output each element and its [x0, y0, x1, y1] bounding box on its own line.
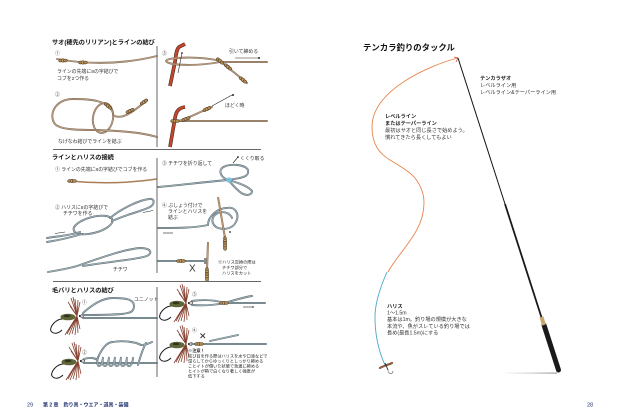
step 2 figure — [52, 341, 157, 380]
step 3 figure: 引いて締める — [229, 48, 258, 55]
label: level line: レベルライン — [385, 113, 416, 120]
heading: line and tippet: ラインとハリスの接続 — [52, 154, 115, 162]
label: tippet: 長め(最長1.5m)にする — [387, 330, 438, 336]
label: level line: またはテーパーライン — [385, 119, 437, 127]
footer left page number: 29 — [27, 402, 33, 408]
bad example figure: ※ハリス交換の際は — [218, 258, 256, 266]
step 3 figure: ③ チチワを折り返して — [162, 160, 212, 167]
arrow tip at rod end — [454, 57, 458, 62]
step 1 figure: ① ラインの先端に8の字結びでコブを作る — [55, 166, 147, 173]
label: tippet: ハリス — [387, 303, 403, 310]
note text: 湿らしてからゆっくりとしっかり締める — [188, 358, 263, 364]
note text — [188, 347, 267, 380]
step 1 figure: ① — [82, 299, 87, 306]
step 4 figure — [158, 197, 237, 250]
rod shadow — [500, 372, 557, 374]
tippet blue line — [375, 272, 387, 365]
label: level line: 慣れてきたら長くしてもよい — [385, 133, 452, 141]
tenkara rod — [458, 58, 558, 370]
bad example figure: チチワ部分で — [222, 264, 247, 271]
step 3 figure — [162, 44, 267, 86]
icon: small fly — [380, 363, 393, 373]
label: tippet: 基本は1m。釣り場の規模が大きな — [387, 315, 467, 323]
step 3 figure: ③ — [162, 50, 167, 57]
step 1 figure — [55, 50, 157, 82]
step 2 figure: チチワを作る — [63, 210, 92, 217]
bad example figure — [158, 242, 256, 281]
step 3 figure: ③ — [192, 291, 197, 298]
tippet loop figure — [48, 248, 150, 273]
step 3 figure: くくり取る — [240, 156, 265, 162]
title: tenkara tackle: テンカラ釣りのタックル — [363, 42, 455, 52]
label: tippet: 本流や、魚がスレている釣り場では — [387, 322, 470, 330]
label: level line — [385, 113, 468, 141]
label: tenkara rod: レベルライン&テーパーライン用 — [480, 89, 556, 96]
step 1 figure: ① — [55, 50, 60, 57]
label: level line: 最初はサオと同じ長さで始めよう。 — [385, 126, 468, 134]
vertical divider middle — [156, 158, 158, 273]
step 4 figure: ④ ぶしょう付けで — [162, 202, 203, 209]
heading: rod tip and line knot: サオ(穂先のリリアン)とラインの結び — [52, 38, 156, 46]
note text: ことイトが傷いた状態で急激に締める — [188, 362, 259, 370]
step 1 figure: ラインの先端に8の字結びで — [57, 68, 119, 75]
step 3 figure — [160, 284, 265, 322]
step 2 figure: なげなわ結びでラインを結ぶ — [58, 138, 122, 145]
note text: ※注意！ — [188, 347, 205, 354]
step 2 figure — [52, 91, 157, 145]
vertical divider top — [156, 46, 158, 147]
label: tippet: 1～1.5m — [387, 310, 407, 316]
label: tenkara rod: レベルライン用 — [480, 82, 516, 89]
section: fly and tippet knot — [51, 284, 267, 380]
bad example figure: X — [189, 264, 196, 274]
tippet loop figure: チチワ — [113, 267, 128, 273]
heading: fly and tippet: 毛バリとハリスの結び — [52, 286, 115, 294]
step 4 figure — [170, 94, 267, 147]
note text: とイトが熱で白くなり著しく強度が — [188, 368, 256, 374]
step 1 figure — [51, 297, 158, 335]
step 4 figure — [160, 325, 266, 363]
arrow: pull — [235, 57, 260, 59]
step 1 figure: コブを2つ作る — [57, 75, 89, 82]
label: tenkara rod — [480, 74, 556, 96]
label: tenkara rod: テンカラザオ — [480, 74, 511, 82]
footer chapter title: 第 2 章 釣り具・ウエア・道具・装備 — [43, 402, 129, 408]
step 4 figure: ✕ — [199, 331, 207, 341]
step 2 figure: ② ハリスに8の字結びで — [55, 204, 108, 211]
step 2 figure: ② — [82, 349, 87, 356]
step 1 figure — [55, 166, 157, 183]
vertical divider bottom — [156, 287, 158, 377]
note text: 結び目を作る際はハリスを水や口液などで — [188, 352, 267, 360]
step 3 figure — [158, 156, 265, 195]
step 2 figure — [47, 199, 154, 242]
label: tippet — [387, 303, 470, 336]
section: rod tip and line knot — [52, 38, 267, 147]
bad example figure: ハリスをカット — [222, 270, 251, 276]
step 4 figure: 結ぶ — [168, 214, 178, 221]
step 4 figure: ラインとハリスを — [168, 208, 207, 215]
step 4 figure: ほどく時 — [225, 102, 245, 109]
step 4 figure: ④ — [192, 327, 197, 334]
level line orange — [372, 58, 458, 272]
step 1 figure: ユニノット — [134, 297, 158, 303]
footer right page number: 28 — [587, 402, 593, 408]
section: line and tippet connection — [47, 154, 265, 281]
step 2 figure: ② — [55, 91, 60, 98]
note text: 低下する — [188, 372, 205, 380]
